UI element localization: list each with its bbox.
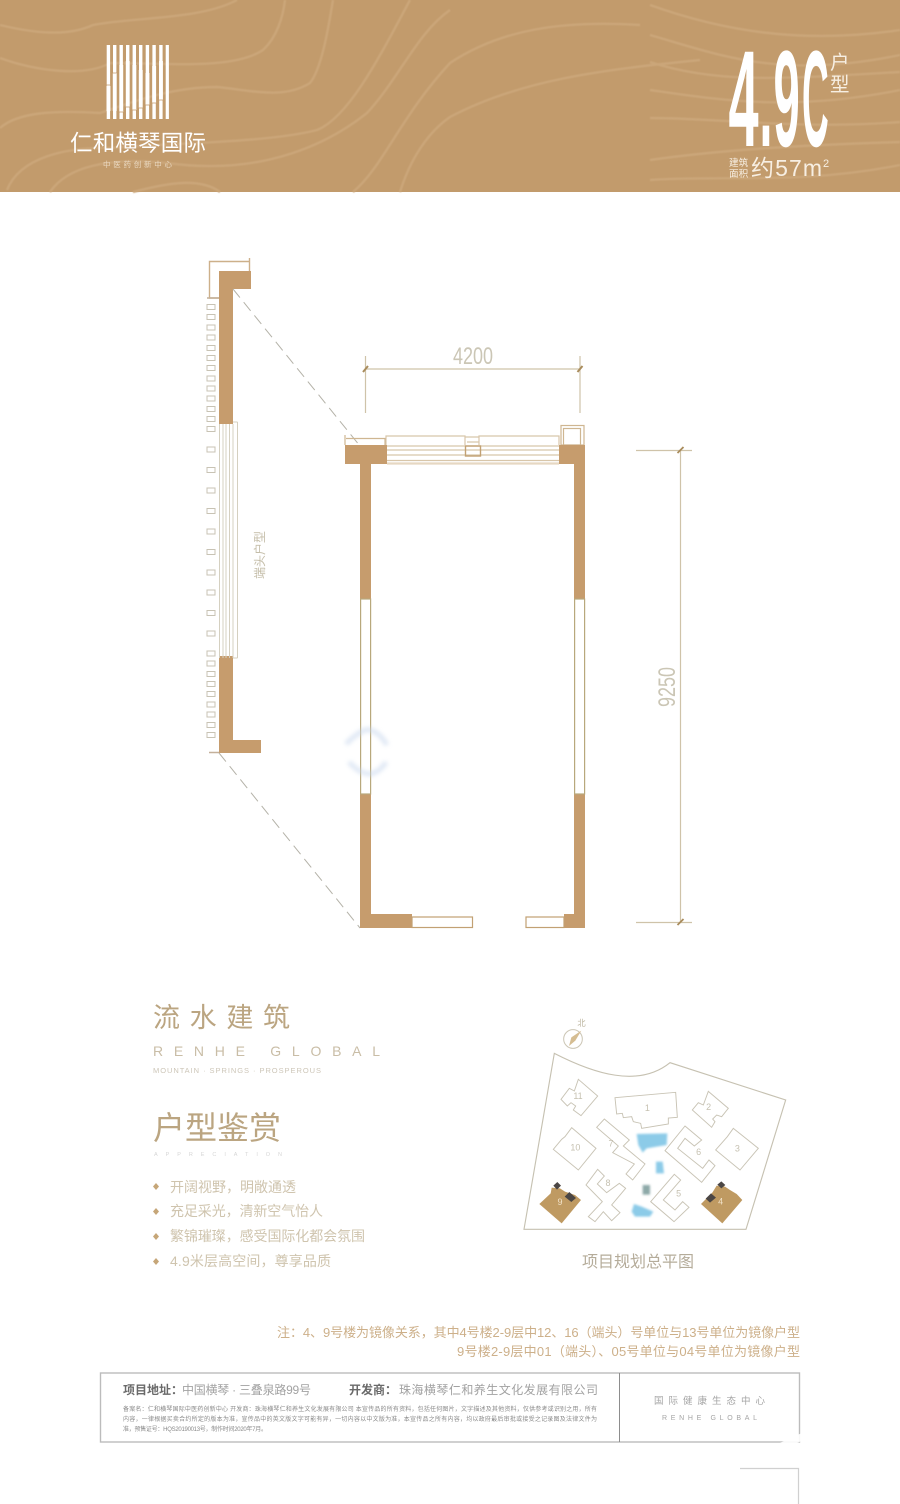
building numbers: 1 [645,1103,650,1113]
english subheading: APPRECIATION [154,1152,282,1158]
brand tagline: 国际健康生态中心 [654,1395,765,1407]
walls [345,445,387,599]
width dimension: 4200 [453,343,493,370]
unit type 4.9C: . [760,21,772,175]
height dimension [636,447,692,925]
project address: 中国横琴 · 三叠泉路99号 [182,1382,311,1397]
feature list: 充足采光，清新空气怡人 [170,1203,323,1219]
elevation label: 端头户型 [252,531,267,579]
feature list: 繁锦璀璨，感受国际化都会氛围 [170,1228,365,1244]
feature list [153,1179,365,1269]
unit type 4.9C: 4 [728,24,759,176]
brand english: RENHE GLOBAL [662,1415,757,1422]
project address [123,1382,598,1397]
compass [564,1018,586,1048]
unit type 4.9C: C [802,23,829,176]
building numbers: 6 [696,1147,701,1157]
building numbers: 4 [718,1196,723,1206]
building numbers: 5 [676,1189,681,1199]
project address: 项目地址： [123,1382,183,1397]
building numbers: 9 [557,1197,562,1207]
floor area: 面积 [729,168,749,180]
legal disclaimer [123,1405,597,1433]
logo name: 仁和横琴国际 [70,131,206,156]
building numbers: 3 [735,1144,740,1154]
dashed projection lines [219,289,360,928]
floor area: 约57m [751,155,822,181]
watermark corner mark [740,1431,815,1504]
width dimension [363,343,582,413]
building numbers: 2 [706,1102,711,1112]
floor area: 2 [823,158,829,170]
site plan [524,1018,786,1229]
legal disclaimer: 备案名：仁和横琴国际中医药创新中心 开发商：珠海横琴仁和养生文化发展有限公司 本宣传品的所有资料，包括任何图片，文字描述及其他资料，仅供参考或识别之用，所有 [123,1405,597,1413]
heading: unit appreciation: 户型鉴赏 [153,1110,281,1146]
heading: flowing water architecture: 流水建筑 [153,1003,290,1033]
project address: 珠海横琴仁和养生文化发展有限公司 [399,1382,598,1397]
project address: 开发商： [349,1382,397,1397]
mirror unit notes: 注：4、9号楼为镜像关系，其中4号楼2-9层中12、16（端头）号单位与13号单位为镜像户型 [277,1325,800,1340]
watermark [346,730,387,774]
legal disclaimer: 内容，一律根据买卖合约所定的版本为准，宣传品中的英文版文字可能有异，一切内容以中文版为准，本宣传品之所有内容，均以政府最后审批或接受之记录图及法律文件为 [123,1415,597,1423]
unit type 4.9C [728,21,829,176]
elevation drawing: end unit [207,258,261,753]
legal disclaimer: 准，预售证号：HQS20190013号，制作时间2020年7月。 [123,1425,267,1433]
floor plan [345,426,585,928]
mirror unit notes [277,1325,800,1359]
unit type label [830,52,850,96]
highlighted buildings 9 and 4 [539,1181,742,1223]
logo mark [106,45,169,119]
building numbers: 10 [570,1143,580,1153]
site plan caption: 项目规划总平图 [582,1253,694,1271]
footer box [100,1373,800,1442]
logo subtitle: 中医药创新中心 [103,159,172,169]
building numbers: 8 [605,1178,610,1188]
feature list: 4.9米层高空间，尊享品质 [170,1253,331,1269]
unit type label: 户 [830,52,850,74]
water features [632,1133,667,1217]
site boundary [524,1053,786,1229]
english tagline: MOUNTAIN · SPRINGS · PROSPEROUS [153,1066,321,1075]
mirror unit notes: 9号楼2-9层中01（端头）、05号单位与04号单位为镜像户型 [457,1344,800,1359]
height dimension: 9250 [654,667,681,707]
building numbers: 11 [573,1091,583,1101]
balcony [345,426,584,464]
unit type 4.9C: 9 [774,22,800,175]
english brand line: RENHE GLOBAL [153,1043,380,1059]
building numbers: 7 [608,1139,613,1149]
buildings [553,1079,758,1222]
building numbers [557,1091,740,1207]
feature list: 开阔视野，明敞通透 [170,1179,296,1195]
compass: 北 [577,1018,586,1028]
header banner [0,0,900,192]
unit type label: 型 [830,74,850,96]
floor area: 建筑 [729,157,749,169]
windows [361,599,585,928]
